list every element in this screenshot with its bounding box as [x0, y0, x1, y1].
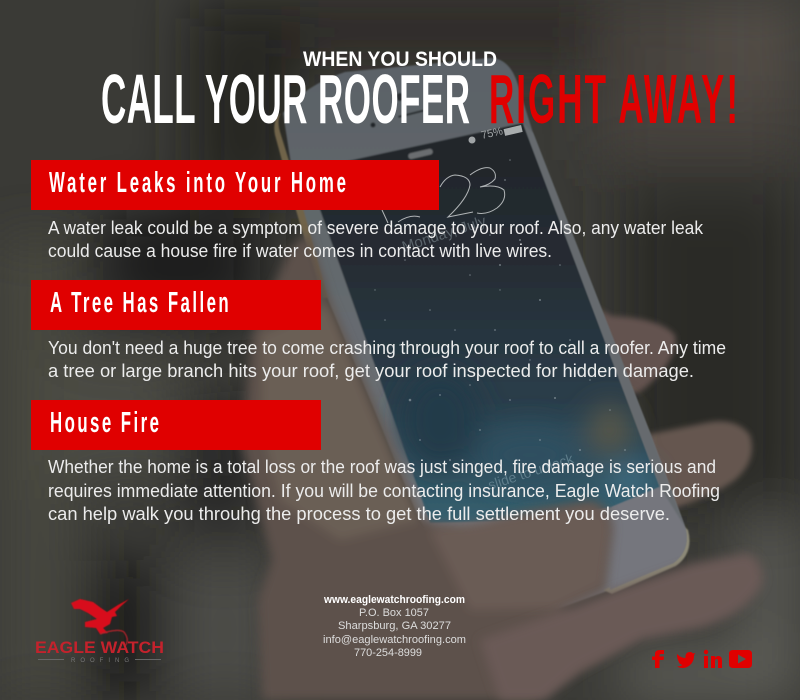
title: [101, 48, 497, 138]
heading bar: tree: A Tree Has Fallen: [50, 288, 229, 319]
contact block: Sharpsburg, GA 30277: [338, 620, 451, 632]
text block: house fire: can help walk you throuhg the process to get the full settlement you deserve.: [48, 504, 670, 524]
hand: palm and thumb: [242, 232, 640, 700]
text block: water leaks: could cause a house fire if water comes in contact with live wires.: [48, 241, 552, 261]
text block: tree: [48, 338, 726, 381]
logo subline: ROOFING: [71, 658, 129, 664]
lock screen clock and status: 75%: [480, 125, 504, 142]
screen nebula: [400, 370, 652, 492]
icon: twitter: [677, 652, 695, 668]
icon: facebook: [652, 650, 664, 668]
logo: Eagle Watch Roofing: [35, 599, 164, 664]
text block: tree: a tree or large branch hits your roof, get your roof inspected for hidden damage.: [48, 361, 694, 381]
text block: water leaks: [48, 218, 704, 261]
contact block: P.O. Box 1057: [359, 607, 429, 619]
lock screen clock and status: [382, 125, 576, 493]
phone screen: [306, 123, 660, 523]
phone gold edge: [274, 113, 328, 298]
text block: water leaks: A water leak could be a symptom of severe damage to your roof. Also, any water leak: [48, 218, 704, 238]
title: red accent: RIGHT AWAY!: [489, 60, 738, 138]
contact block: info@eaglewatchroofing.com: [323, 634, 466, 646]
title: kicker line: WHEN YOU SHOULD: [303, 48, 497, 71]
heading bar: water leaks: Water Leaks into Your Home: [49, 168, 346, 199]
contact block: www.eaglewatchroofing.com: [323, 594, 465, 606]
heading bar: house fire: [31, 400, 321, 450]
heading bar: tree: [31, 280, 321, 330]
logo wordmark: EAGLE WATCH: [35, 638, 164, 657]
screen stars: [374, 159, 626, 461]
title: main line: CALL YOUR ROOFER: [101, 60, 470, 138]
contact block: 770-254-8999: [354, 647, 422, 659]
text block: tree: You don't need a huge tree to come crashing through your roof to call a roofer. Any time: [48, 338, 726, 358]
icon: linkedin: [704, 650, 722, 668]
heading bar: water leaks: [31, 160, 439, 210]
icon: youtube: [729, 650, 752, 668]
front camera and speaker: [370, 122, 376, 128]
hand: lower finger: [480, 553, 762, 700]
bezel repaint over nebula: [523, 123, 686, 590]
lock screen clock and status: Monday, July: [400, 213, 489, 256]
heading bar: house fire: House Fire: [50, 408, 159, 439]
phone body: [274, 58, 690, 615]
text block: house fire: Whether the home is a total loss or the roof was just singed, fire damage is serious and: [48, 457, 716, 477]
text block: house fire: requires immediate attention. If you will be contacting insurance, Eagle Watch Roofing: [48, 481, 720, 501]
icon: red eagle: [71, 599, 129, 646]
text block: house fire: [48, 457, 720, 524]
rear fingers: [590, 305, 752, 510]
social icons: [652, 650, 752, 668]
lock screen clock and status: slide to unlock: [486, 450, 576, 493]
contact block: [323, 594, 466, 659]
home pill: [408, 148, 433, 160]
